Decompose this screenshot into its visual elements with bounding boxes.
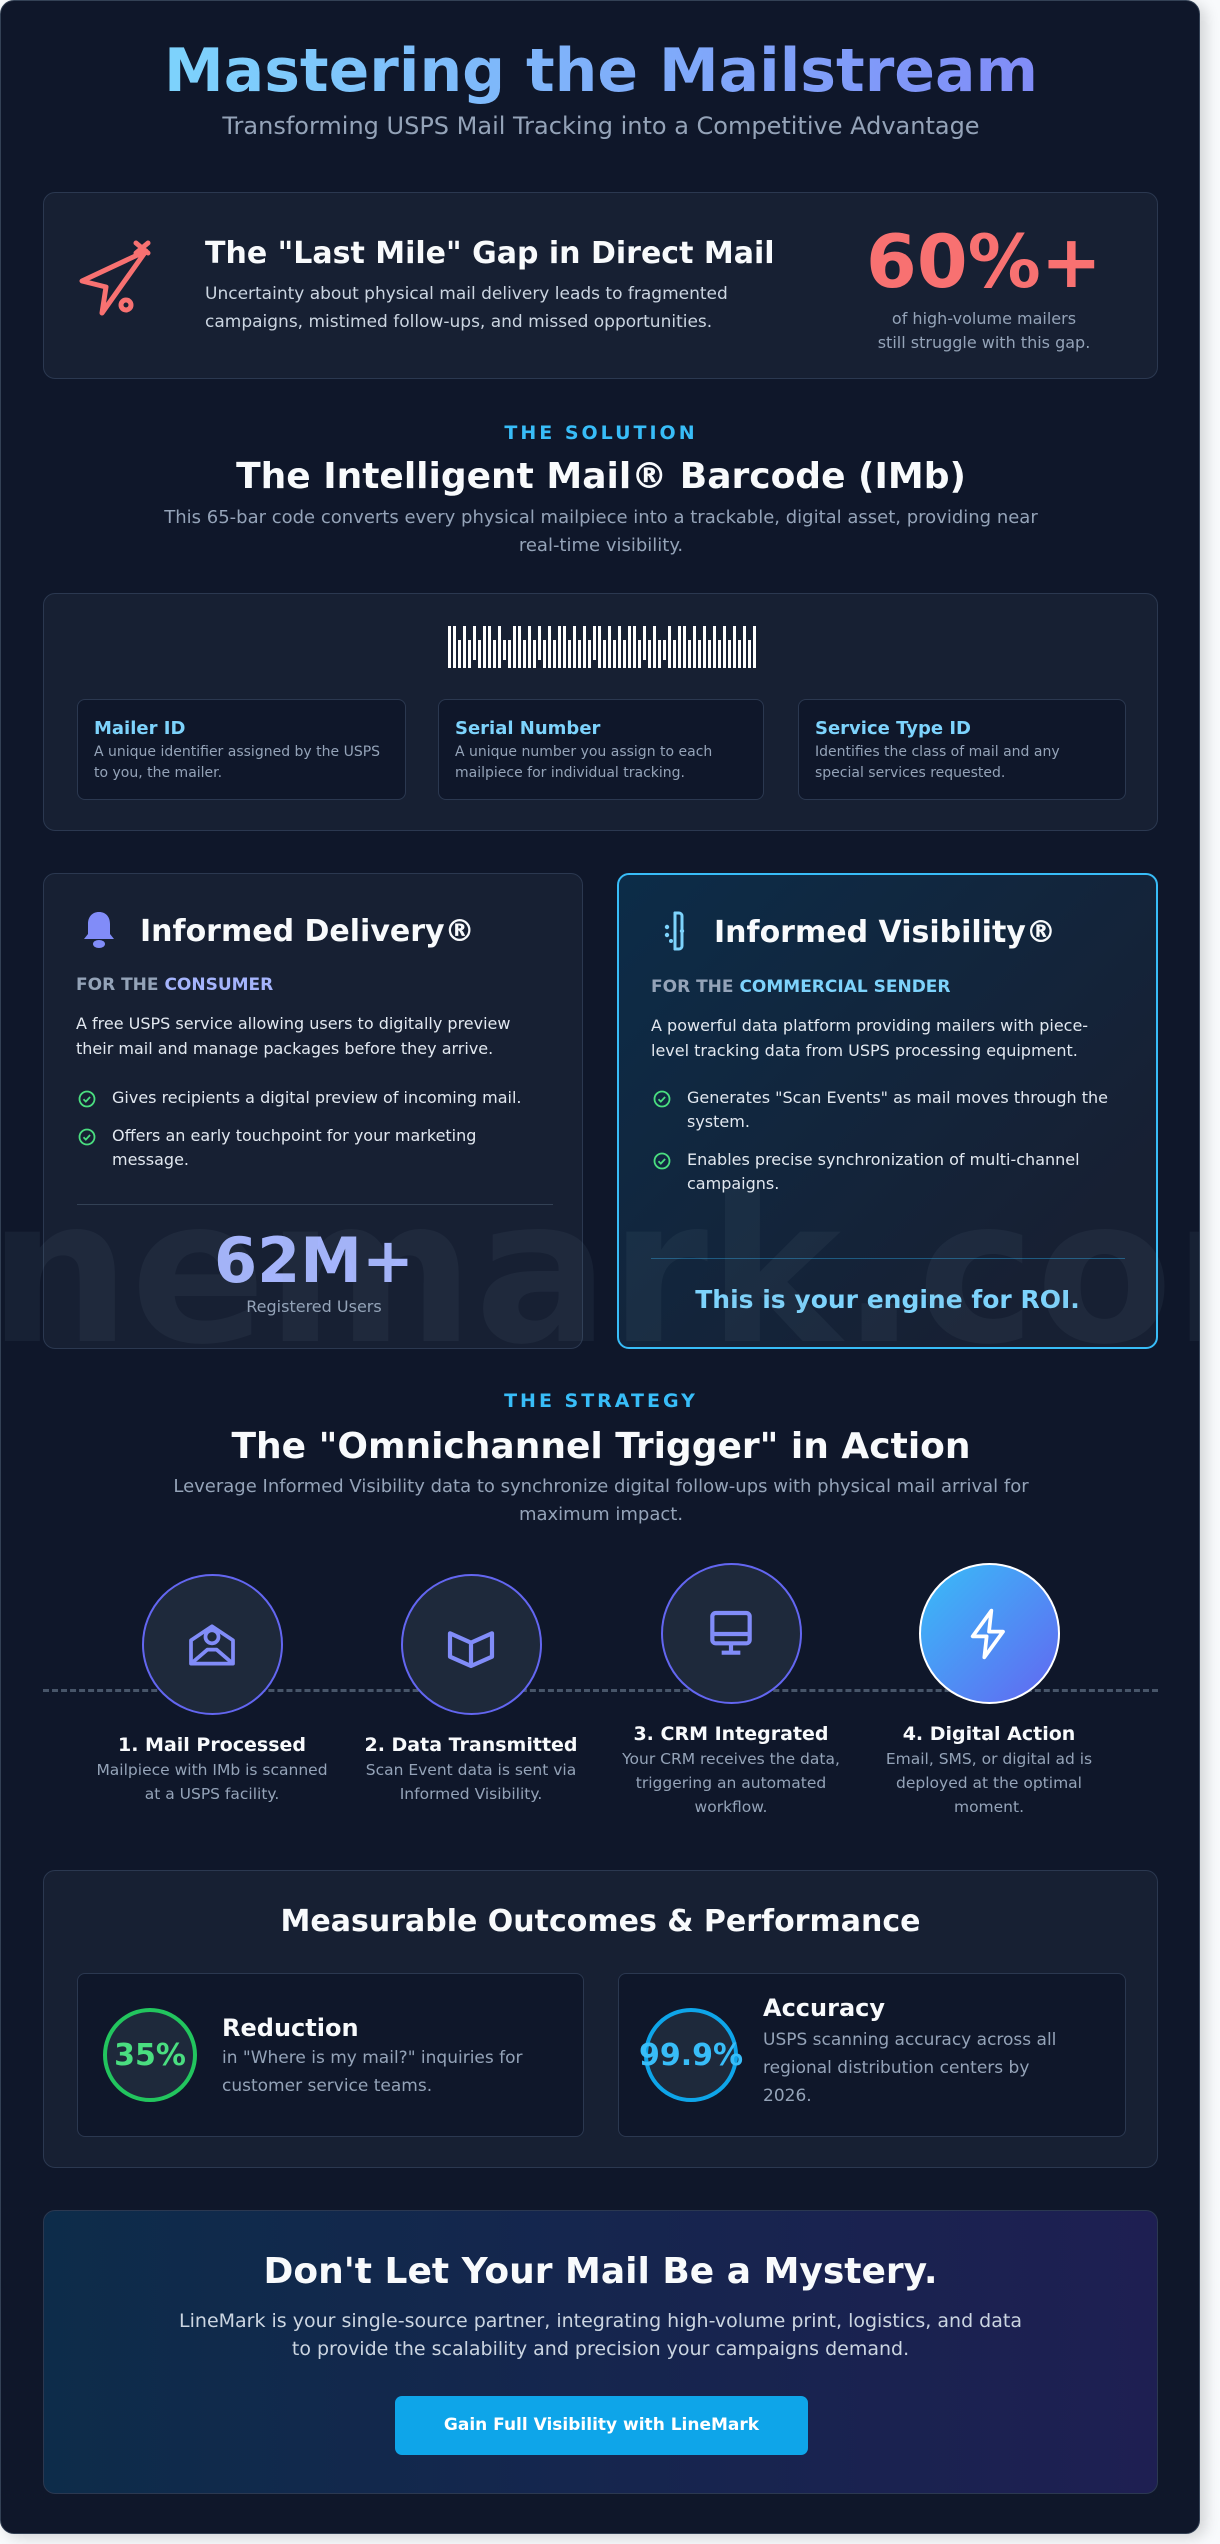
- button: Gain Full Visibility with LineMark: [444, 2415, 759, 2435]
- panel: barcode: [43, 593, 1158, 831]
- heading: The "Last Mile" Gap in Direct Mail: [205, 236, 775, 271]
- icon: send: [80, 240, 150, 316]
- step 1: Mailpiece with IMb is scanned at a USPS facility.: [96, 1761, 328, 1803]
- heading: IMb: The Intelligent Mail® Barcode (IMb): [236, 456, 966, 497]
- panel: call to action: [43, 2210, 1158, 2494]
- box: service type id: Identifies the class of mail and any special services requested.: [815, 744, 1060, 781]
- panel: last mile gap: [43, 192, 1158, 379]
- step 4: 4. Digital Action: [903, 1723, 1075, 1745]
- icon: mail: [142, 1574, 282, 1715]
- box: mailer id: A unique identifier assigned by the USPS to you, the mailer.: [94, 744, 380, 781]
- text: strategy description: Leverage Informed Visibility data to synchronize digital follow-ups with physical mail arrival for maximum impact.: [173, 1476, 1029, 1525]
- step 2: 2. Data Transmitted: [364, 1734, 578, 1756]
- text: IMb description: This 65-bar code converts every physical mailpiece into a trackable, digital asset, providing near real-time visibility.: [164, 507, 1038, 556]
- subtitle: Transforming USPS Mail Tracking into a Competitive Advantage: [222, 112, 980, 140]
- bullet list: Gives recipients a digital preview of incoming mail.: [112, 1088, 522, 1107]
- panel: informed visibility: [617, 873, 1158, 1349]
- timeline: [43, 1563, 1158, 1816]
- section label: the strategy: THE STRATEGY: [504, 1390, 698, 1412]
- text: LineMark is your single-source partner, integrating high-volume print, logistics, and data to provide the scalability and precision your campaigns demand.: [179, 2310, 1022, 2360]
- heading: Informed Visibility®: [714, 915, 1056, 950]
- stat 62M+: 62M+: [214, 1224, 414, 1297]
- button: [395, 2396, 808, 2455]
- step 3: [622, 1563, 840, 1816]
- stat 60%+: still struggle with this gap.: [878, 333, 1090, 352]
- panel: outcomes: [43, 1870, 1158, 2168]
- stat 60%+: of high-volume mailers: [892, 309, 1076, 328]
- metric: 35% reduction: in "Where is my mail?" inquiries for customer service teams.: [222, 2048, 523, 2096]
- stat 60%+: [866, 220, 1102, 352]
- metric: 35% reduction: Reduction: [222, 2014, 359, 2042]
- heading: Don't Let Your Mail Be a Mystery.: [264, 2251, 938, 2292]
- metric: 99.9% accuracy: Accuracy: [763, 1994, 885, 2022]
- icon: lightning: [918, 1563, 1060, 1704]
- step 4: Email, SMS, or digital ad is deployed at the optimal moment.: [886, 1750, 1092, 1816]
- description: A powerful data platform providing mailers with piece-level tracking data from USPS processing equipment.: [651, 1016, 1088, 1060]
- box: mailer id: [77, 699, 406, 800]
- metric: 35% reduction: [77, 1973, 584, 2137]
- box: mailer id: Mailer ID: [94, 718, 185, 739]
- bullet list: [654, 1088, 1108, 1193]
- description: A free USPS service allowing users to digitally preview their mail and manage packages before they arrive.: [76, 1014, 510, 1058]
- metric: 99.9% accuracy: USPS scanning accuracy across all regional distribution centers by 2026.: [763, 2030, 1056, 2106]
- box: serial number: Serial Number: [455, 718, 600, 739]
- heading: Informed Delivery®: [140, 914, 475, 949]
- bullet list: [78, 1088, 522, 1169]
- step 3: Your CRM receives the data, triggering an automated workflow.: [622, 1750, 840, 1816]
- metric: 99.9% accuracy: [618, 1973, 1126, 2137]
- step 1: 1. Mail Processed: [118, 1734, 306, 1756]
- title: Mastering the Mailstream: [164, 36, 1038, 106]
- step 1: [96, 1574, 328, 1803]
- step 4: [886, 1563, 1092, 1816]
- box: service type id: [798, 699, 1126, 800]
- section label: the solution: THE SOLUTION: [504, 422, 698, 444]
- body text: Uncertainty about physical mail delivery leads to fragmented campaigns, mistimed follow-ups, and missed opportunities.: [205, 284, 728, 332]
- icon: monitor: [660, 1563, 802, 1704]
- icon: scanner: [664, 912, 684, 950]
- panel: informed delivery: [43, 873, 583, 1349]
- step 3: 3. CRM Integrated: [633, 1723, 829, 1745]
- box: serial number: [438, 699, 764, 800]
- box: serial number: A unique number you assign to each mailpiece for individual tracking.: [455, 744, 712, 781]
- stat 60%+: 60%+: [866, 220, 1102, 305]
- box: service type id: Service Type ID: [815, 718, 971, 739]
- audience label: FOR THE CONSUMER: [76, 975, 273, 995]
- audience label: FOR THE COMMERCIAL SENDER: [651, 977, 951, 997]
- bullet list: Enables precise synchronization of multi-channel campaigns.: [687, 1150, 1080, 1193]
- barcode: [448, 626, 756, 668]
- callout: ROI: This is your engine for ROI.: [695, 1285, 1080, 1314]
- metric: 99.9% accuracy: 99.9%: [639, 2038, 743, 2072]
- heading: Measurable Outcomes & Performance: [281, 1904, 920, 1939]
- icon: bell: [84, 912, 114, 948]
- step 2: Scan Event data is sent via Informed Visibility.: [366, 1761, 576, 1803]
- step 2: [364, 1574, 578, 1803]
- bullet list: Offers an early touchpoint for your marketing message.: [112, 1126, 476, 1169]
- icon: book: [400, 1574, 542, 1715]
- heading: omnichannel trigger: The "Omnichannel Trigger" in Action: [231, 1426, 971, 1467]
- bullet list: Generates "Scan Events" as mail moves through the system.: [687, 1088, 1108, 1131]
- metric: 35% reduction: 35%: [114, 2038, 186, 2072]
- stat 62M+: Registered Users: [246, 1297, 382, 1316]
